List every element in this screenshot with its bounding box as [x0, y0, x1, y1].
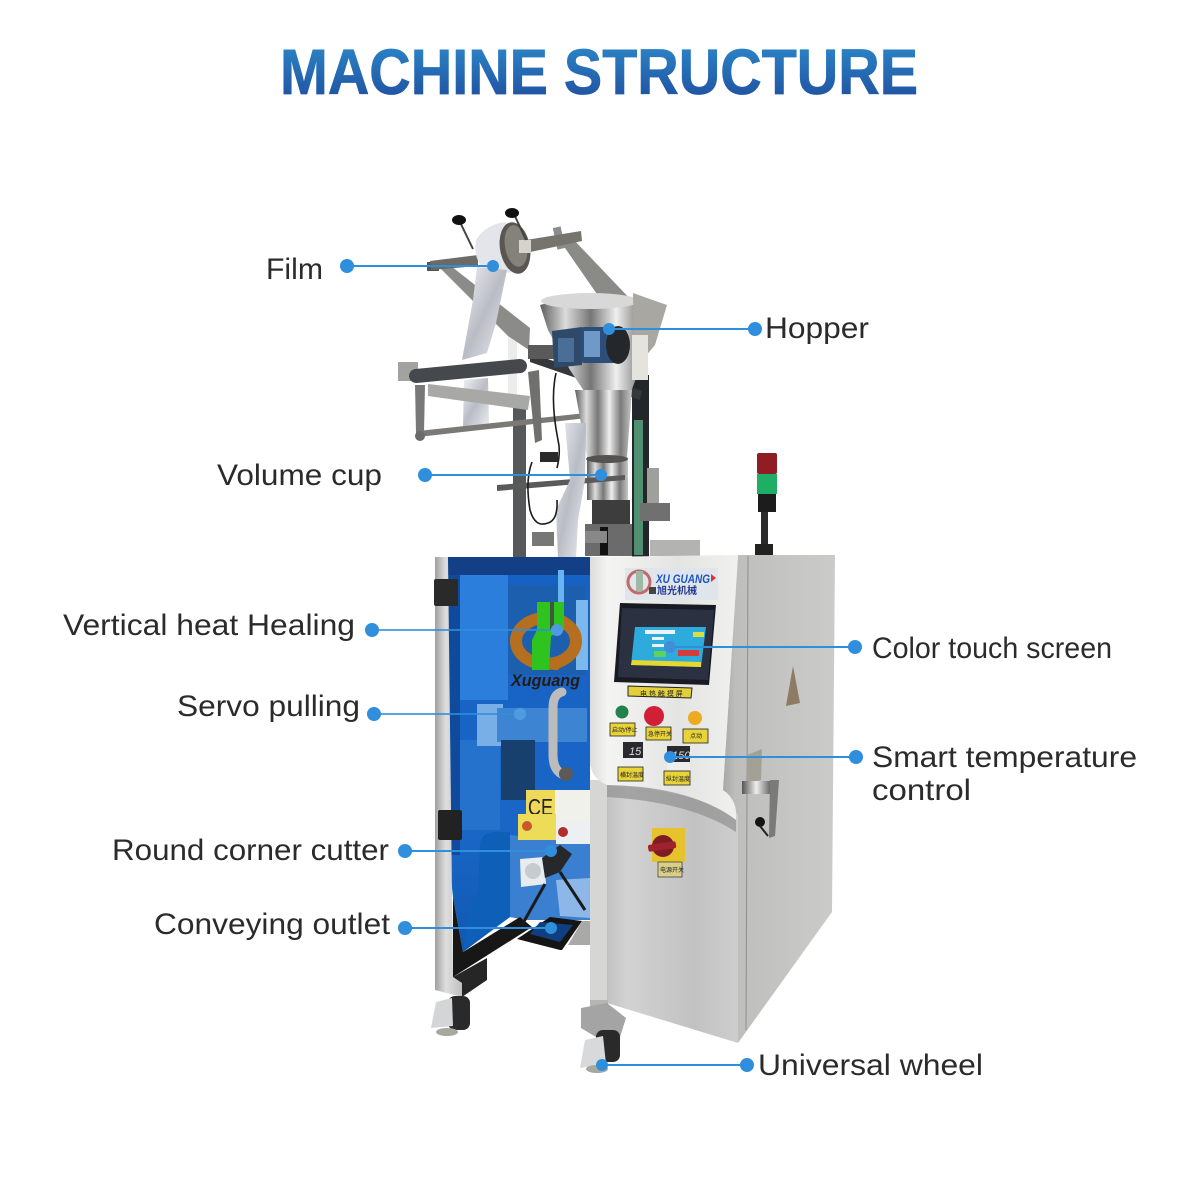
main power switch: 电源开关	[660, 866, 684, 874]
forming tube film	[556, 423, 586, 558]
silver door frame	[435, 557, 532, 997]
control panel lower column	[590, 765, 738, 1043]
callout: conveying outlet: Conveying outlet	[154, 908, 391, 941]
callout: smart temperature control	[664, 741, 1137, 807]
door lock and keys	[742, 780, 779, 838]
logo wordmark: Xuguang	[510, 671, 581, 690]
temperature displays: 150	[672, 750, 691, 762]
callout: universal wheel: Universal wheel	[758, 1049, 983, 1082]
control panel face	[590, 555, 738, 820]
side door seam	[746, 556, 748, 1030]
callout: universal wheel	[596, 1049, 983, 1082]
brand plate: XU GUANG	[655, 574, 710, 586]
hopper	[540, 293, 667, 457]
callout: color touch screen: Color touch screen	[872, 632, 1112, 665]
callout: vertical heat healing	[63, 609, 563, 642]
brand plate: 旭光机械	[657, 584, 697, 597]
temperature displays	[618, 742, 691, 785]
handle knob	[559, 767, 573, 781]
callout: film	[266, 253, 499, 286]
conveying outlet	[517, 917, 590, 950]
machine illustration	[398, 208, 835, 1073]
panel title label	[628, 686, 692, 698]
film roll	[452, 208, 534, 428]
door logo	[510, 602, 581, 690]
round corner cutter	[520, 845, 590, 925]
side cabinet	[722, 555, 835, 1043]
title: MACHINE STRUCTURE	[280, 36, 918, 108]
left wheel	[431, 996, 470, 1036]
safety labels	[518, 790, 590, 844]
wiring and sensor	[528, 373, 607, 546]
control buttons: 点动	[690, 732, 702, 740]
panel title label: 电 热 触 摸 屏	[640, 689, 683, 698]
callout: conveying outlet	[154, 908, 557, 941]
safety labels: CE	[528, 794, 553, 820]
callout: round corner cutter: Round corner cutter	[112, 834, 389, 867]
door handle	[553, 692, 566, 776]
control buttons	[610, 706, 708, 743]
callout: hopper: Hopper	[765, 312, 869, 345]
callout: hopper	[603, 312, 869, 345]
callout: film: Film	[266, 253, 323, 286]
right frame foot and wheel	[580, 1003, 626, 1073]
panel shadow	[607, 785, 736, 832]
callout: smart temperature control: control	[872, 774, 971, 807]
callout: vertical heat healing: Vertical heat Healing	[63, 609, 355, 642]
control buttons: 急停开关	[648, 730, 672, 738]
brand plate	[625, 568, 718, 600]
stack warning light	[755, 453, 777, 555]
callout: servo pulling: Servo pulling	[177, 690, 360, 723]
motor	[552, 326, 630, 368]
temperature displays: 横封温度	[620, 771, 644, 779]
temperature displays: 15	[629, 746, 642, 758]
temperature displays: 纵封温度	[666, 775, 690, 783]
touch screen	[614, 603, 716, 685]
callout: servo pulling	[177, 690, 526, 723]
callout: round corner cutter	[112, 834, 557, 867]
callout: smart temperature control: Smart temperature	[872, 741, 1137, 774]
callout: volume cup	[217, 459, 607, 492]
volume cup	[497, 455, 700, 556]
blue transparent door	[448, 557, 590, 952]
warning triangle	[786, 666, 800, 706]
callout: color touch screen	[664, 632, 1112, 665]
upper frame: posts and film holder arms	[427, 226, 649, 557]
main power switch	[648, 828, 685, 877]
door nameplate	[746, 749, 762, 785]
callout: volume cup: Volume cup	[217, 459, 382, 492]
rollers and rods	[398, 345, 642, 443]
control buttons: 启动/停止	[612, 726, 638, 734]
hinges	[434, 579, 462, 840]
